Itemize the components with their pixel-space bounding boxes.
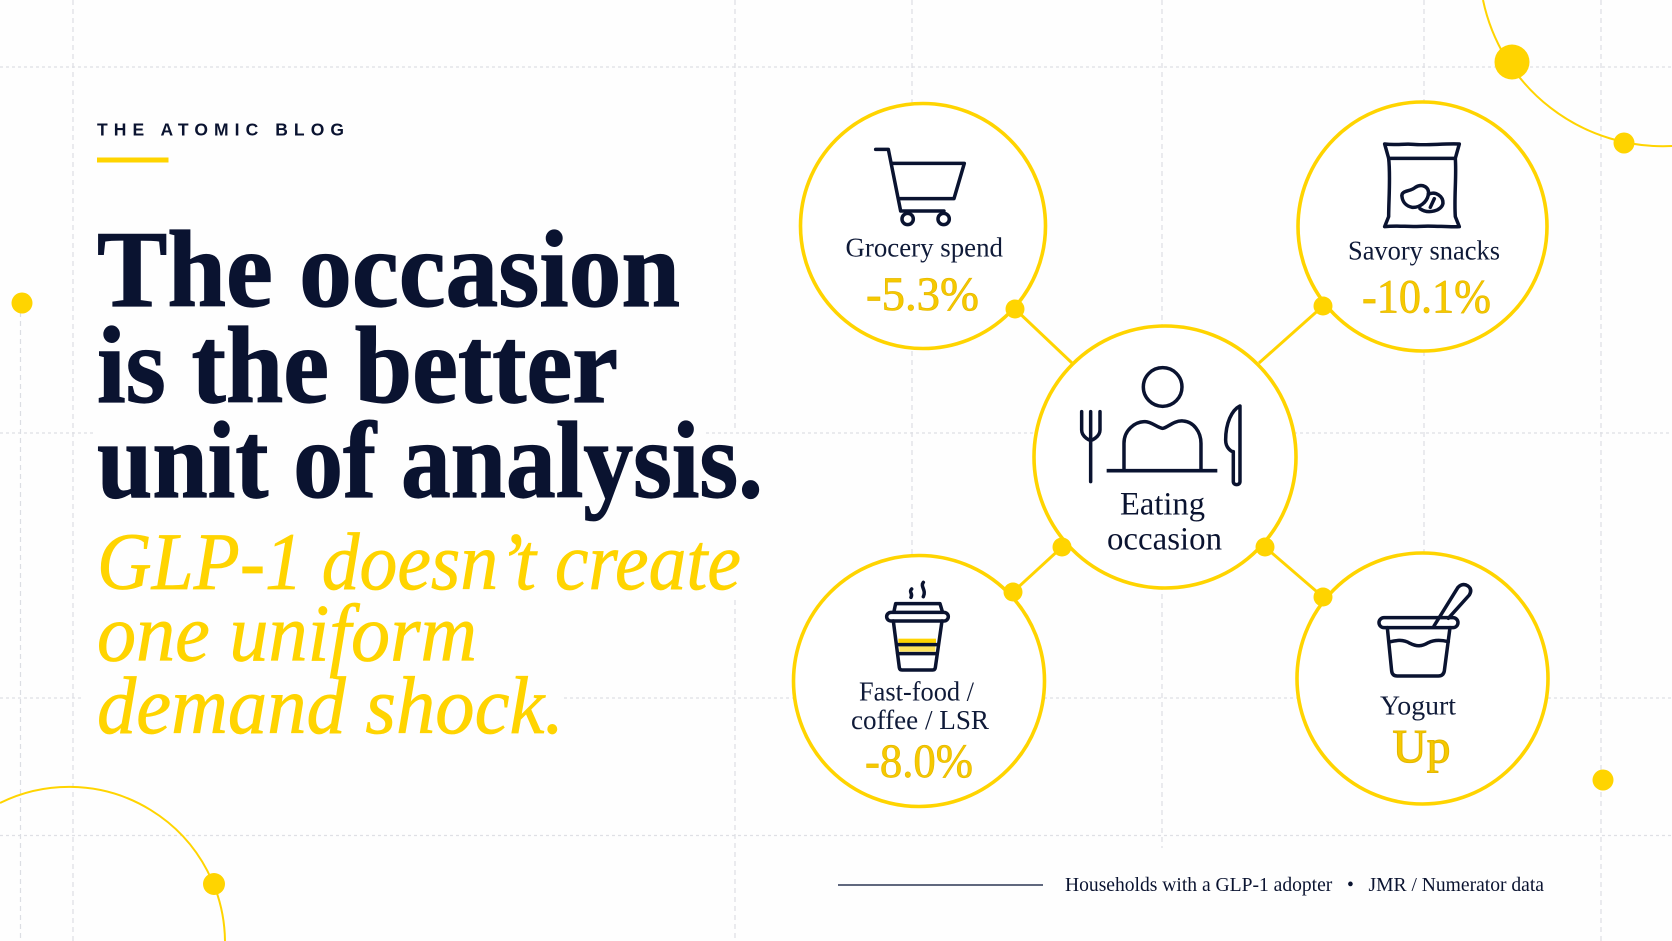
label: fast-food / coffee / LSR: coffee / LSR [851,704,990,735]
title: unit of analysis. [97,400,763,521]
panel: savory snacks [1298,102,1547,351]
node: lower-left connector [1052,538,1072,556]
eyebrow underline [97,158,168,162]
footer source note: Households with a GLP-1 adopter • JMR / Numerator data [1065,875,1544,896]
icon: snack bag [1385,144,1459,227]
title: The occasion [97,209,680,330]
value: yogurt: Up [1392,720,1450,774]
icon: coffee cup [887,582,948,670]
label: eating occasion: Eating [1120,486,1205,522]
label: fast-food / coffee / LSR: Fast-food / [859,676,974,706]
subtitle [97,516,741,751]
label: fast-food / coffee / LSR [851,676,990,735]
icon: person at table with fork and knife [1082,368,1240,485]
title [97,209,763,521]
node: lower-right connector [1256,538,1274,556]
connector: centre to yogurt [1265,547,1323,597]
connector: centre to snacks [1259,306,1323,363]
footer rule [838,884,1043,886]
icon: shopping cart [876,149,964,225]
label: savory snacks: Savory snacks [1348,234,1500,266]
value: fast-food: -8.0% [865,735,973,788]
panel: eating occasion (centre) [1034,326,1296,588]
decorative arc: top right [1483,0,1672,154]
eyebrow: blog name: THE ATOMIC BLOG [97,120,344,140]
node: grocery connector [1006,300,1024,318]
title: is the better [97,305,618,426]
panel: yogurt [1297,553,1548,804]
label: eating occasion [1107,486,1222,558]
label: eating occasion: occasion [1107,522,1222,558]
icon: yogurt cup with spoon [1379,585,1471,676]
panel: grocery spend [800,104,1046,348]
value: savory snacks: -10.1% [1362,270,1491,324]
decorative arc: bottom left [0,787,225,941]
node: snacks connector [1314,296,1332,316]
connector: centre to fast food [1013,547,1062,592]
connector: centre to grocery [1015,309,1072,363]
decorative dot: left [12,292,32,314]
label: grocery spend: Grocery spend [846,232,1003,262]
value: grocery spend: -5.3% [866,268,979,321]
subtitle: demand shock. [97,660,564,751]
panel: fast-food / coffee / LSR [794,556,1044,806]
node: fast food connector [1004,582,1022,602]
subtitle: GLP-1 doesn’t create [97,516,741,607]
decorative dot: right [1592,770,1614,790]
node: yogurt connector [1314,588,1332,606]
label: yogurt: Yogurt [1380,690,1456,720]
subtitle: one uniform [97,588,477,678]
